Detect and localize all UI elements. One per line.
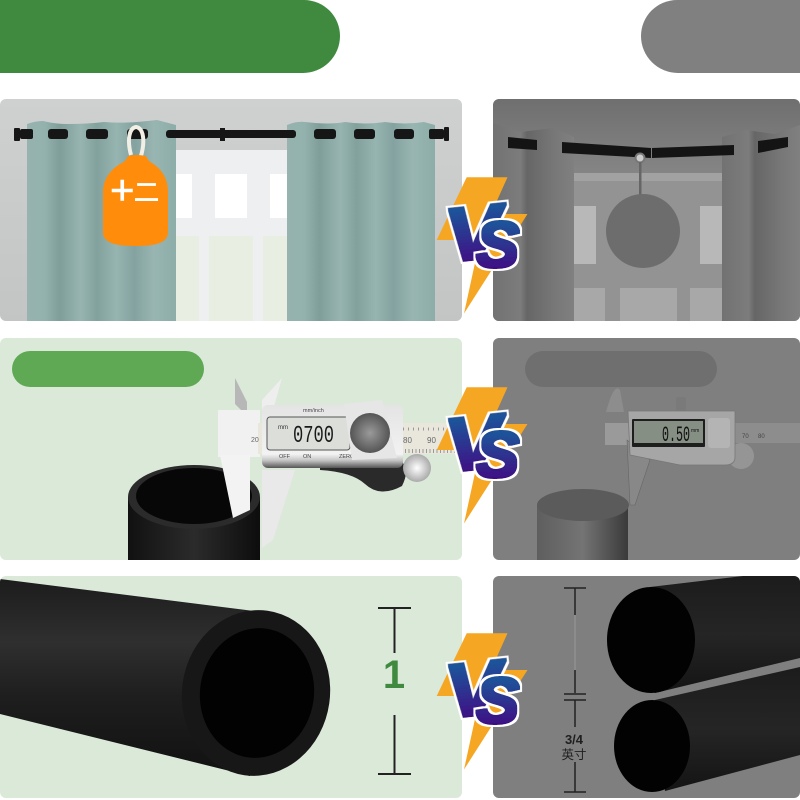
panel: thick rod diameter <box>0 576 462 798</box>
gray window <box>574 173 722 321</box>
label: 3/4 inch: 3/4 <box>565 732 584 747</box>
weight loop <box>129 127 143 156</box>
panel: curtain rod holding weight <box>0 99 462 321</box>
orange weight tag <box>103 155 168 246</box>
panel: thin rod diameter <box>493 576 800 798</box>
label: 3/4 inch <box>562 734 586 760</box>
VS badge row 2: S <box>476 418 519 491</box>
lower tube <box>614 667 800 792</box>
VS badge row 2 <box>437 387 528 524</box>
VS badge row 3: S <box>476 664 519 737</box>
gray caliper: 70 <box>742 434 749 440</box>
panel: thin wall measurement <box>493 338 800 560</box>
gray left curtain <box>493 123 574 321</box>
digital caliper: 20 <box>251 437 259 444</box>
upper tube <box>607 576 800 693</box>
left curtain <box>27 120 176 321</box>
VS badge row 2: V <box>441 398 513 489</box>
curtain rod <box>14 127 449 141</box>
dimension lines <box>564 588 586 792</box>
gray header pill <box>641 0 800 73</box>
right curtain <box>287 122 435 321</box>
label: 3/4 inch: 英寸 <box>561 748 587 762</box>
VS badge row 3 <box>437 633 528 770</box>
caliper labels: mm/inch <box>303 408 324 414</box>
caliper scale numbers: 80 <box>403 436 412 445</box>
green header pill <box>0 0 340 73</box>
large black tube <box>0 579 341 785</box>
green label pill <box>12 351 204 387</box>
VS badge row 1: S <box>476 208 519 281</box>
gray caliper: 80 <box>758 434 765 440</box>
VS badge row 1 <box>437 177 528 314</box>
gray caliper <box>605 388 800 505</box>
caliper screen <box>267 417 350 450</box>
panel: bent curtain rod <box>493 99 800 321</box>
caliper labels <box>279 408 355 460</box>
digital caliper <box>218 378 463 548</box>
orange weight tag: 二 <box>134 173 159 209</box>
battery compartment <box>344 400 397 460</box>
gray caliper screen: 0.50 <box>662 423 690 448</box>
weight hook <box>636 154 644 197</box>
caliper labels: ZERO <box>339 454 355 460</box>
panel: thick wall measurement <box>0 338 463 560</box>
gray pipe <box>537 489 629 560</box>
caliper labels: ON <box>303 454 311 460</box>
button cell battery <box>350 413 390 453</box>
sagging rod <box>508 137 788 158</box>
dimension line: 1 <box>378 608 411 774</box>
value: 1: 1 <box>383 653 405 697</box>
gray ball weight <box>606 194 680 268</box>
gray caliper screen: mm <box>691 428 699 434</box>
caliper screen: mm <box>278 425 288 431</box>
caliper screen: 0700 <box>293 423 334 450</box>
tag symbols: + <box>110 166 135 213</box>
VS badge row 1: V <box>441 188 513 279</box>
window <box>176 150 287 321</box>
caliper labels: OFF <box>279 454 291 460</box>
gray label pill <box>525 351 717 387</box>
VS badge row 3: V <box>441 644 513 735</box>
gray caliper screen <box>632 419 705 448</box>
caliper knob <box>403 454 431 482</box>
black pipe <box>128 465 260 560</box>
digital caliper: 90 <box>427 436 436 445</box>
gray right curtain <box>722 125 800 321</box>
